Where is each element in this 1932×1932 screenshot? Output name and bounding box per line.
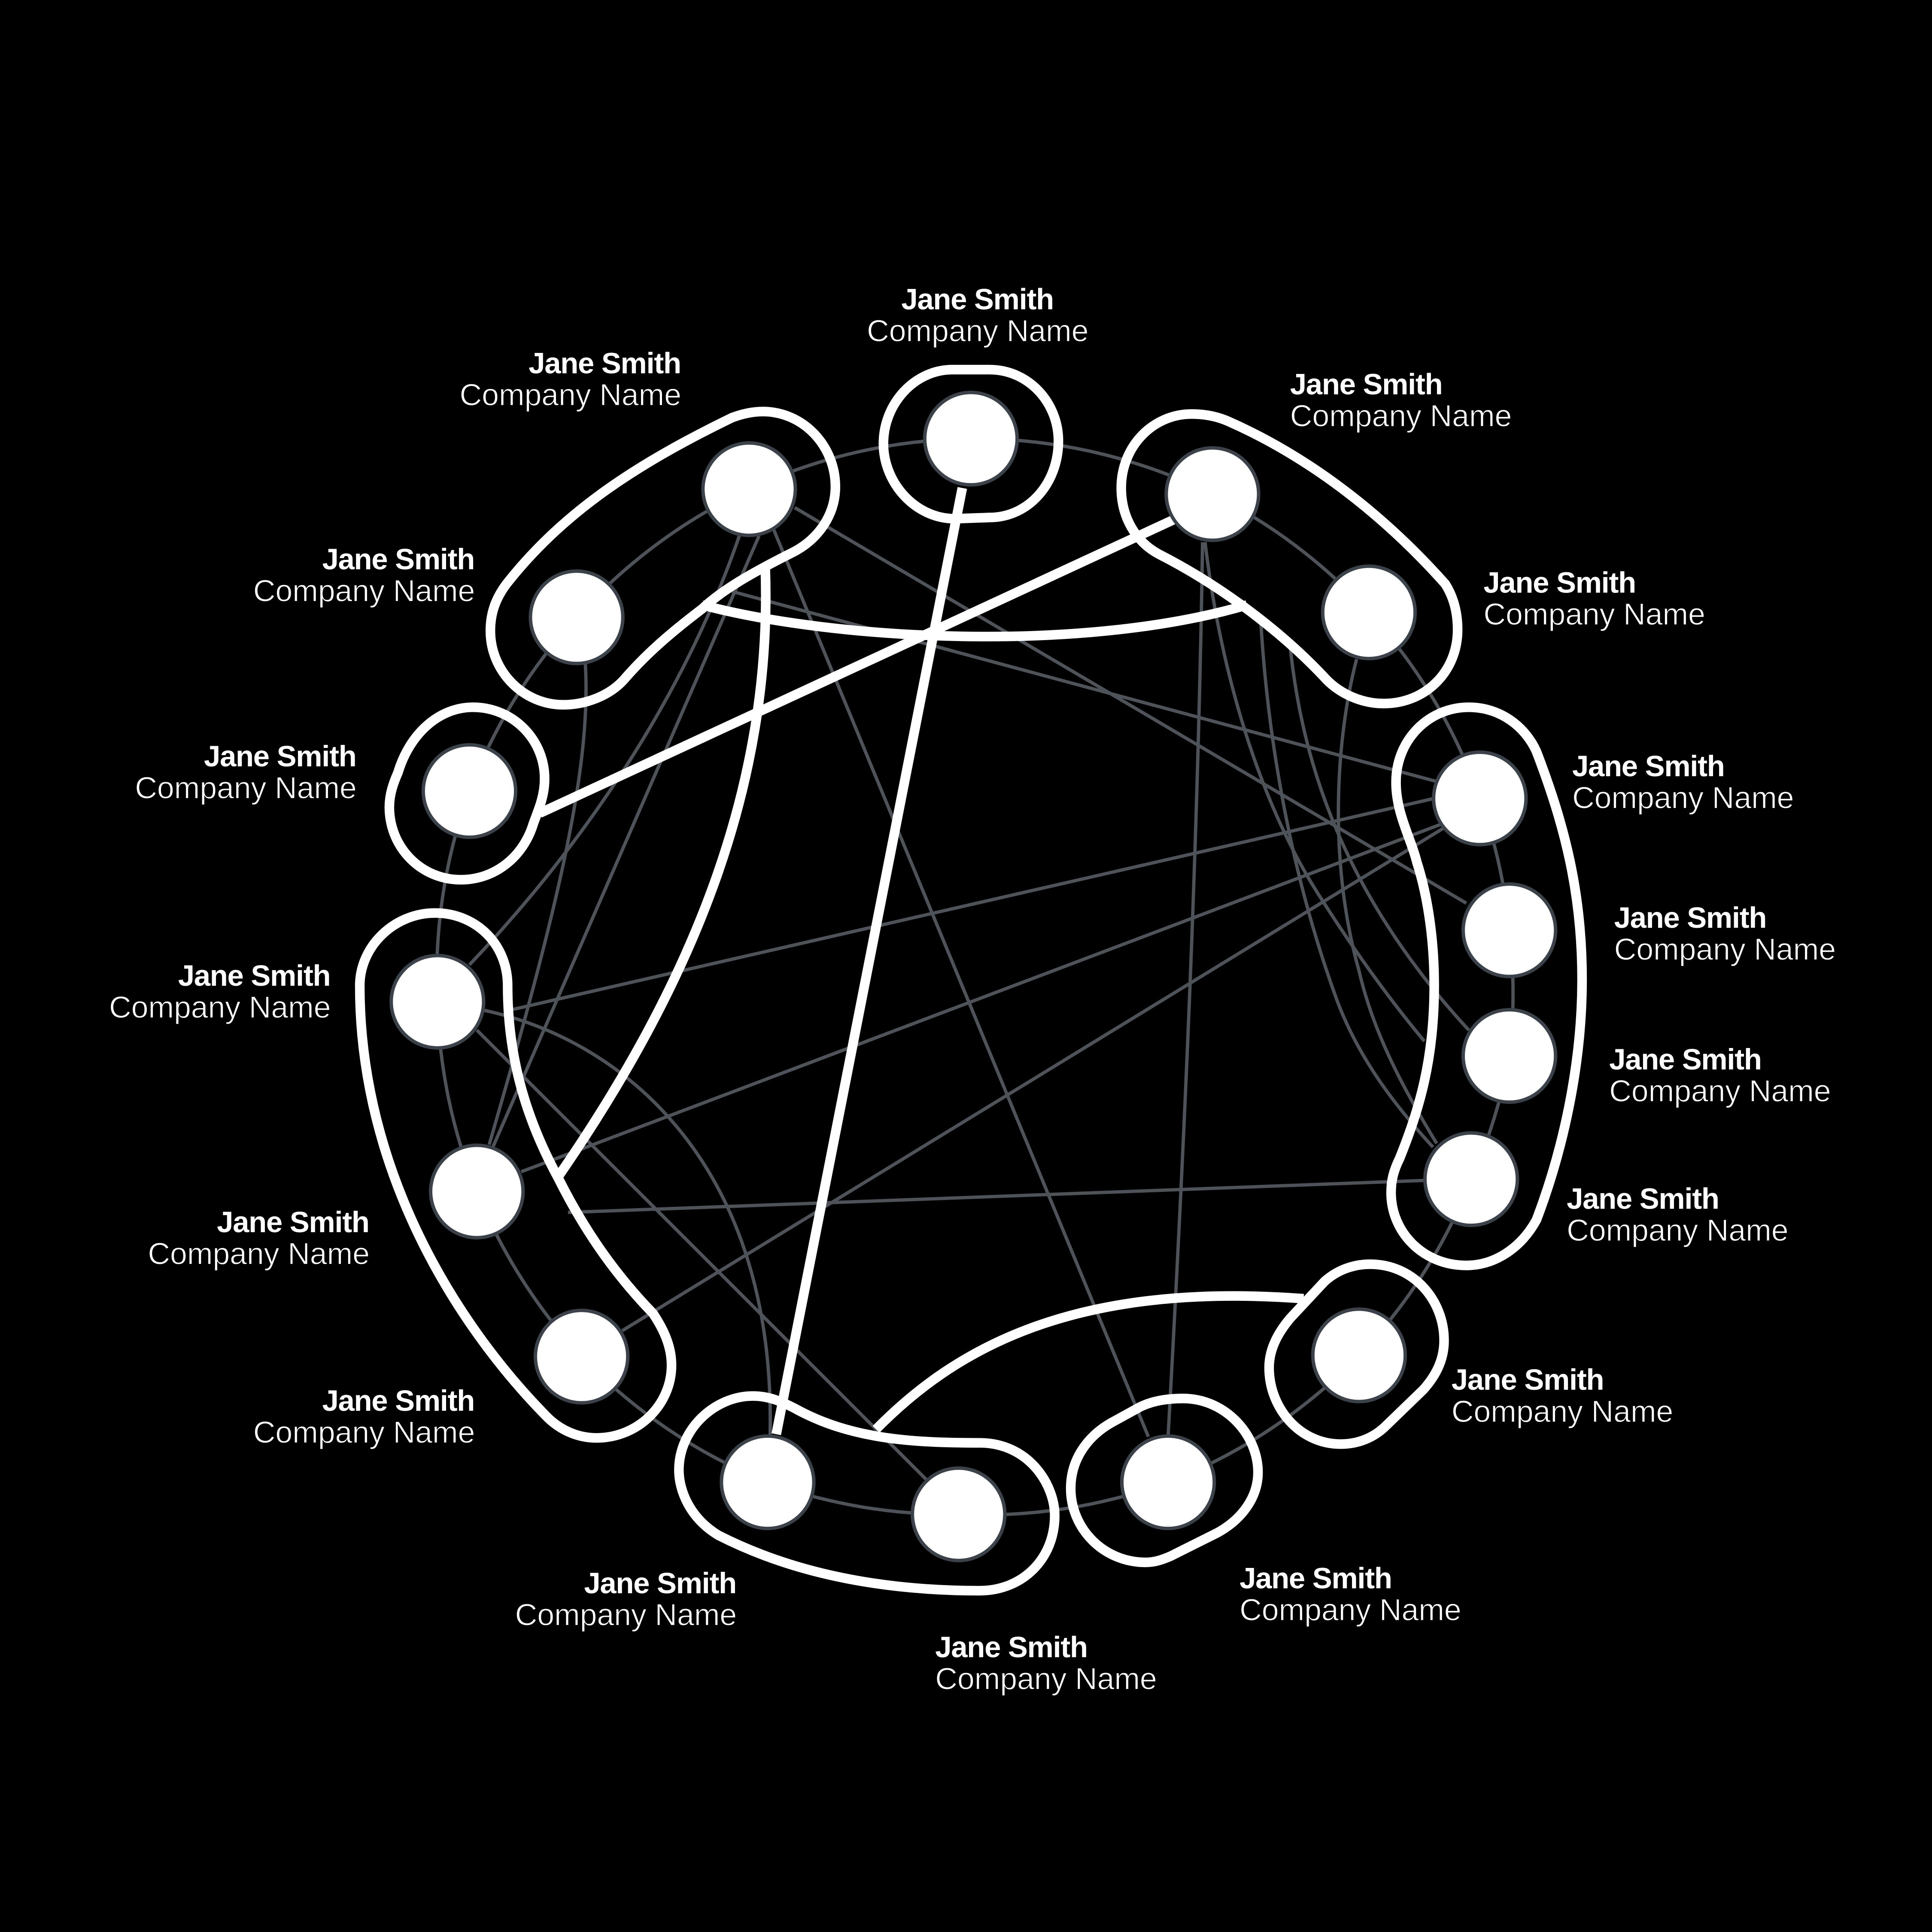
label: bottom left — [515, 1567, 737, 1632]
cluster: lower right single — [1269, 1264, 1444, 1444]
label: lower left: Company Name — [253, 1416, 475, 1450]
label: lower right — [1452, 1363, 1673, 1429]
label: top: Company Name — [867, 314, 1089, 348]
label: upper right 1: Jane Smith — [1290, 368, 1443, 401]
label: bottom left: Jane Smith — [584, 1567, 737, 1600]
label: upper right 1 — [1290, 368, 1512, 433]
cluster: lower left trio — [360, 913, 671, 1438]
label: right 1: Company Name — [1572, 781, 1794, 815]
cluster: right group of four — [1391, 707, 1582, 1265]
label: right 1: Jane Smith — [1572, 750, 1725, 783]
label: left 3: Company Name — [148, 1237, 370, 1271]
label: right 1 — [1572, 750, 1794, 815]
label: upper left 1: Company Name — [459, 378, 681, 412]
label: bottom centre: Jane Smith — [935, 1631, 1088, 1664]
label: left 2: Company Name — [109, 990, 331, 1025]
cluster: bottom single — [1071, 1398, 1258, 1562]
nodes — [391, 392, 1555, 1561]
label: right 4: Company Name — [1567, 1213, 1789, 1248]
label: right 2: Jane Smith — [1614, 901, 1767, 934]
label: bottom right: Jane Smith — [1239, 1561, 1392, 1595]
label: upper left 2: Jane Smith — [322, 543, 475, 576]
label: upper left 1 — [459, 347, 681, 412]
label: upper left 2: Company Name — [253, 574, 475, 608]
label: left 2 — [109, 959, 331, 1025]
label: bottom left: Company Name — [515, 1598, 737, 1632]
label: right 3: Jane Smith — [1609, 1043, 1762, 1076]
cluster: upper left pair — [490, 412, 835, 705]
cluster: upper right pair — [1121, 414, 1458, 704]
label: right 3 — [1609, 1043, 1831, 1109]
label: upper right 2 — [1483, 566, 1705, 632]
label: lower right: Jane Smith — [1452, 1363, 1604, 1396]
label: lower right: Company Name — [1452, 1394, 1673, 1429]
ring connections between neighbouring nodes — [437, 439, 1513, 1515]
cluster: top single — [884, 370, 1058, 519]
label: upper left 2 — [253, 543, 475, 608]
label: upper left 1: Jane Smith — [529, 347, 681, 380]
label: bottom centre — [935, 1631, 1157, 1696]
label: right 3: Company Name — [1609, 1074, 1831, 1109]
label: bottom centre: Company Name — [935, 1662, 1157, 1696]
cluster: left single — [389, 707, 544, 880]
label: lower left — [253, 1384, 475, 1450]
thin cross connections — [469, 507, 1469, 1480]
label: left 1: Jane Smith — [204, 740, 357, 773]
label: left 1 — [135, 740, 357, 805]
label: left 1: Company Name — [135, 771, 357, 805]
label: bottom right: Company Name — [1239, 1593, 1461, 1627]
label: right 4 — [1567, 1182, 1789, 1248]
label: right 4: Jane Smith — [1567, 1182, 1719, 1215]
label: left 3: Jane Smith — [217, 1206, 370, 1239]
label: bottom right — [1239, 1561, 1461, 1627]
label: upper right 1: Company Name — [1290, 399, 1512, 433]
cluster: bottom pair — [679, 1396, 1055, 1591]
label: left 2: Jane Smith — [178, 959, 331, 992]
label: top: Jane Smith — [901, 283, 1054, 316]
label: right 2: Company Name — [1614, 933, 1836, 967]
label: lower left: Jane Smith — [322, 1384, 475, 1417]
label: upper right 2: Jane Smith — [1483, 566, 1636, 599]
thick connection lines — [540, 488, 1303, 1434]
label: right 2 — [1614, 901, 1836, 967]
label: top — [867, 283, 1089, 348]
cluster outlines — [360, 370, 1582, 1591]
label: upper right 2: Company Name — [1483, 597, 1705, 632]
label: left 3 — [148, 1206, 370, 1271]
